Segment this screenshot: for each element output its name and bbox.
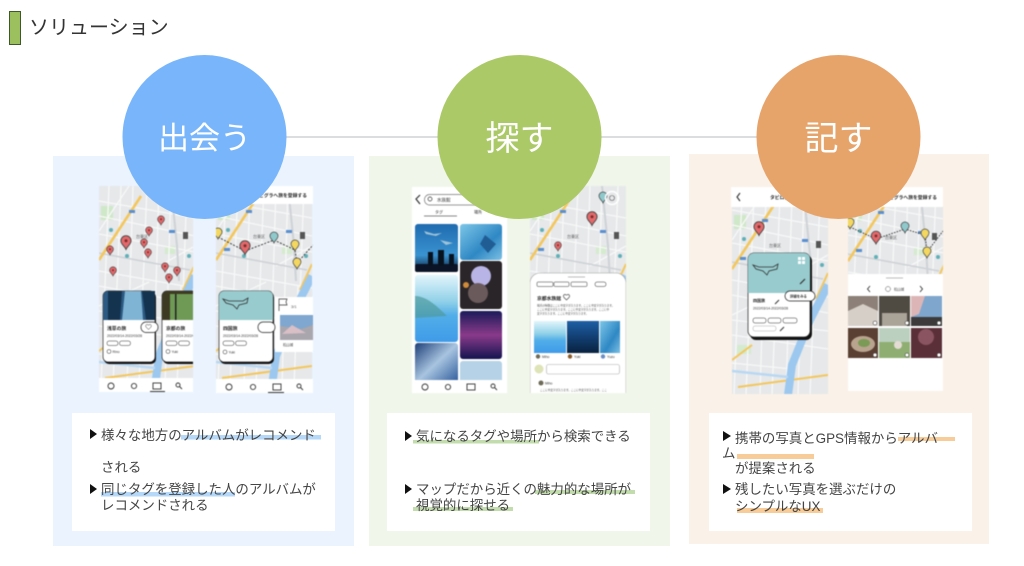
phone: route map: タビグラへ旅を登録する [254, 192, 307, 199]
phone: recommend map [99, 186, 203, 392]
card: 四国旅 [219, 291, 275, 364]
phone: album edit [731, 187, 828, 395]
panel: 記す [689, 154, 989, 544]
phone: photo selection: タビグラへ旅を登録する [884, 194, 937, 201]
card: 四国旅: 四国旅 [223, 325, 238, 332]
title: ソリューション [29, 17, 169, 39]
card: album [748, 253, 815, 340]
card: 四国旅: Yuki [228, 350, 235, 354]
phone: route map: 3/1 [291, 304, 297, 309]
circle: 出会う [122, 55, 286, 219]
card: 京都の旅 [162, 291, 203, 364]
card: 京都の旅: 京都の旅 [166, 325, 185, 332]
phone: aquarium detail: Miho [545, 382, 552, 386]
panel: 出会う [53, 156, 354, 546]
text box: 出会う: 同じタグを登録した人のアルバムが [101, 482, 316, 497]
card: 四国旅: 2022/03/14-2022/03/28 [223, 334, 258, 338]
circle: 探す: 探す [486, 120, 554, 158]
connector line [204, 136, 838, 138]
phone: aquarium detail: Yuzu [607, 355, 615, 359]
phone: route map: 松山城 [283, 342, 294, 347]
phone: aquarium detail: Miho [542, 355, 549, 359]
circle: 探す [438, 55, 602, 219]
phone: search results: 水族館 [437, 196, 451, 204]
text box: 探す: マップだから近くの魅力的な場所が [416, 482, 632, 497]
card: 京都の旅: Yuki [172, 350, 178, 354]
phone: aquarium detail: 場所の特徴はここに中文字が入ります。ここに中文字が入ります。 [537, 304, 614, 308]
title [10, 12, 169, 44]
phone: photo selection [846, 187, 944, 391]
phone: aquarium detail: 京都水族館 [537, 295, 561, 302]
phone: aquarium detail [530, 186, 626, 403]
phone: route map [214, 186, 313, 393]
text box: 記す: ム [722, 446, 735, 461]
card: 浅草の旅: Rino [112, 350, 120, 354]
card: album: 2022/03/14-2022/03/28 [753, 306, 788, 310]
text box: 出会う: される [101, 460, 141, 475]
text box: 探す: 気になるタグや場所から検索できる [416, 429, 631, 444]
phone: album edit: タビログ [770, 194, 789, 201]
text box: 記す [709, 413, 972, 531]
phone: aquarium detail: Yuki [574, 355, 581, 359]
text box: 出会う: レコメンドされる [101, 498, 209, 513]
circle: 記す: 記す [804, 120, 872, 158]
text box: 記す: 残したい写真を選ぶだけの [735, 482, 896, 497]
circle: 記す [756, 55, 920, 219]
text box: 記す: 携帯の写真とGPS情報からアルバ [735, 431, 938, 446]
phone: aquarium detail: ここに中文字が入ります。ここに中文字が入ります。ここに中 [537, 308, 610, 312]
text box: 探す: 視覚的に探せる [416, 498, 510, 513]
phone: aquarium detail: ここに中文字が入ります。ここに中文字が入ります。ここ [540, 388, 607, 392]
panel: 探す [369, 156, 670, 546]
phone: search results: 場所 [474, 208, 482, 214]
phone: photo selection: 松山城 [894, 286, 905, 292]
card: album: 詳細をみる [790, 294, 807, 298]
text box: 探す [387, 413, 650, 531]
card: 京都の旅: 2022/03/14-2022/03/28 [166, 334, 201, 338]
phone: search results [412, 187, 507, 393]
text box: 出会う [72, 413, 335, 531]
phone: aquarium detail: 文字が入ります。ここに中文字が入ります。 [537, 312, 588, 316]
text box: 記す: シンプルなUX [735, 499, 820, 514]
card: 浅草の旅 [103, 291, 158, 364]
phone: search results: タグ [435, 208, 443, 214]
circle: 出会う: 出会う [158, 121, 251, 156]
card: album: 四国旅 [753, 297, 765, 303]
card: 浅草の旅: 2022/03/14-2022/03/28 [107, 334, 142, 338]
text box: 記す: が提案される [735, 461, 816, 476]
text box: 出会う: 様々な地方のアルバムがレコメンド [101, 428, 316, 443]
card: 浅草の旅: 浅草の旅 [107, 325, 126, 332]
